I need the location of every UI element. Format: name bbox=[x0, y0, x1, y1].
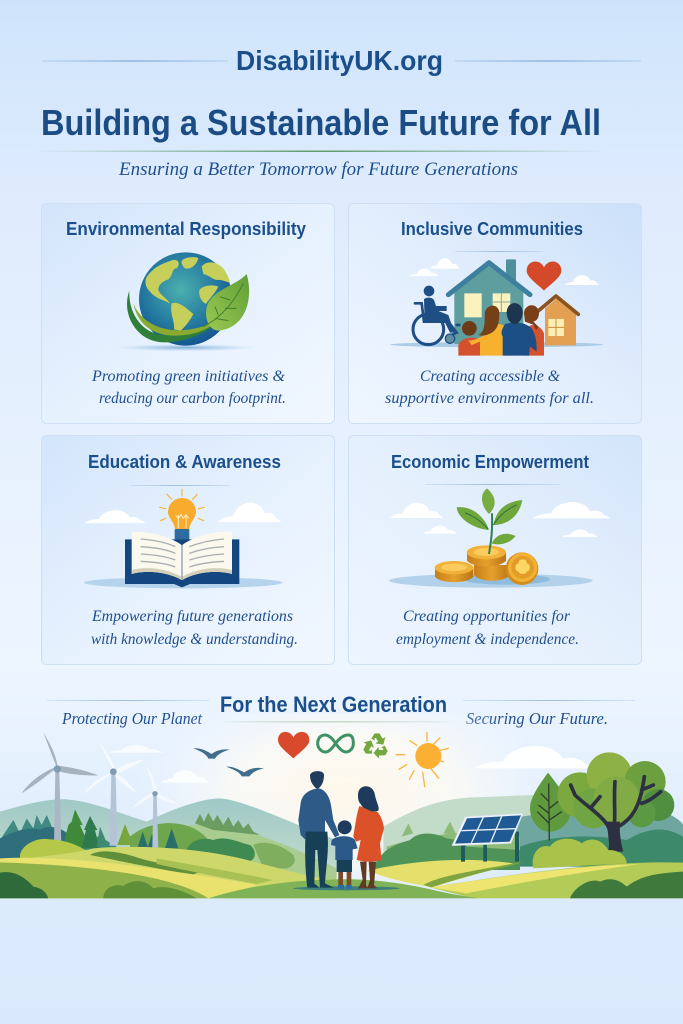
heading: Education & Awareness bbox=[88, 452, 281, 472]
child bbox=[331, 820, 358, 889]
title: Building a Sustainable Future for All bbox=[41, 102, 601, 143]
wind turbines bbox=[22, 733, 180, 848]
landscape illustration bbox=[0, 714, 683, 898]
header: site name with side rules: DisabilityUK.org bbox=[236, 45, 443, 76]
birds bbox=[193, 748, 264, 776]
clouds bbox=[108, 745, 594, 783]
icon part: seedling bbox=[489, 513, 492, 554]
description bbox=[91, 368, 286, 407]
solar panel bbox=[452, 813, 523, 862]
description bbox=[91, 608, 298, 648]
description: Creating opportunities for bbox=[403, 608, 571, 625]
icon: infinity loop bbox=[318, 735, 353, 752]
heading: Inclusive Communities bbox=[401, 219, 583, 239]
icon: recycling symbol bbox=[360, 733, 389, 760]
icon part: book bbox=[125, 539, 239, 587]
icon: sun bbox=[396, 733, 448, 787]
panel: Education & Awareness bbox=[42, 436, 334, 664]
description bbox=[396, 608, 579, 648]
description: with knowledge & understanding. bbox=[91, 631, 298, 648]
description: Promoting green initiatives & bbox=[91, 368, 286, 385]
subtitle: Ensuring a Better Tomorrow for Future Generations bbox=[118, 159, 518, 180]
small tree bbox=[530, 773, 571, 841]
icon part: family group bbox=[458, 338, 482, 356]
icon part: bulb bbox=[168, 498, 196, 529]
description: Creating accessible & bbox=[420, 368, 561, 385]
panel: Inclusive Communities bbox=[348, 204, 642, 424]
heading: Environmental Responsibility bbox=[66, 219, 306, 239]
icon: heart bbox=[278, 732, 309, 758]
yellow-green hedge bbox=[533, 839, 627, 868]
icon: community with houses and wheelchair bbox=[390, 258, 603, 356]
tagline left: Protecting Our Planet bbox=[61, 709, 203, 728]
icon: coins with seedling bbox=[389, 488, 610, 588]
right forest bbox=[373, 822, 683, 870]
woman bbox=[353, 786, 384, 888]
description: employment & independence. bbox=[396, 631, 579, 648]
man bbox=[298, 771, 339, 888]
bushes and fields bbox=[0, 838, 683, 898]
big tree bbox=[557, 752, 674, 852]
description: reducing our carbon footprint. bbox=[99, 390, 286, 407]
icon part: small house bbox=[545, 298, 576, 345]
description: supportive environments for all. bbox=[385, 390, 594, 407]
section heading: For the Next Generation: For the Next Generation bbox=[220, 692, 447, 717]
family silhouette bbox=[293, 771, 400, 890]
heading: Economic Empowerment bbox=[391, 452, 589, 472]
icon: globe with leaf bbox=[113, 252, 257, 351]
icon: open book with lightbulb bbox=[84, 489, 283, 588]
description: Empowering future generations bbox=[91, 608, 293, 625]
panel: Environmental Responsibility bbox=[42, 204, 334, 424]
description bbox=[385, 368, 594, 407]
left forest bbox=[0, 809, 260, 860]
hills bbox=[0, 795, 683, 880]
icon part: heart bbox=[527, 262, 561, 291]
panel: Economic Empowerment bbox=[348, 436, 642, 664]
icon part: swoosh bbox=[127, 291, 210, 342]
tagline right: Securing Our Future. bbox=[466, 709, 608, 728]
icon part: coin stacks bbox=[435, 568, 473, 582]
icon part: wheelchair user bbox=[413, 303, 459, 345]
